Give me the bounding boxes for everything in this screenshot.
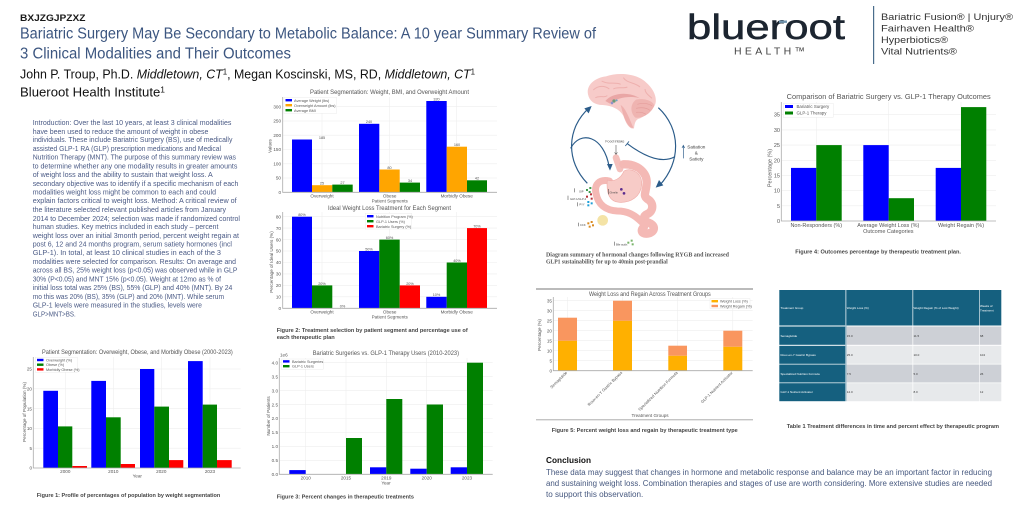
chart: ideal weight loss treatment for each segment: 70% [473,224,481,228]
chart: weight loss and regain across treatment groups: Percentage (%) [537,319,542,351]
caption: figure 2: each therapeutic plan [277,335,335,341]
chart: weight loss and regain across treatment groups: 15 [547,338,552,343]
chart: comparison of bariatric surgery vs GLP-1: Non-Responders (%) [790,223,842,229]
chart: patient segmentation weight BMI overweight amount: 27 [340,181,345,185]
chart: bariatric surgeries vs GLP-1 users: 1e6 [280,352,288,358]
chart: overweight obese morbidly obese population: Morbidly Obese (%) [46,368,80,372]
table 1: treatment differences [779,290,1001,401]
table 1: treatment differences: Weight Loss (%) [847,306,869,310]
chart: patient segmentation weight BMI overweight amount: 200 [273,133,281,138]
chart: weight loss and regain across treatment groups: 20 [547,328,552,333]
chart: ideal weight loss treatment for each segment: 60% [386,236,394,240]
chart: comparison of bariatric surgery vs GLP-1: Weight Regain (%) [938,223,984,229]
chart: comparison of bariatric surgery vs GLP-1: 25 [774,143,780,149]
chart: overweight obese morbidly obese population: 10 [27,426,32,431]
chart: ideal weight loss treatment for each segment: 70 [276,226,281,231]
chart: weight loss and regain across treatment groups: Weight Loss (%) [720,300,749,304]
abstract text: across all BS, 25% weight loss (p<0.05) was observed while in GLP [33,266,237,274]
table 1: treatment differences: 15.0 [847,334,853,338]
abstract text: GLP-1 levels were measured in the studies, levels were [33,301,202,310]
arrows: brain gut loop [571,106,676,188]
diagram: hormonal changes brain and gut [568,74,706,246]
chart: overweight obese morbidly obese population: Overweight (%) [46,358,73,362]
chart: patient segmentation weight BMI overweight amount: 150 [273,147,281,152]
logo: blueroot health [687,8,845,58]
chart: overweight obese morbidly obese population: 2010 [108,469,119,474]
chart: patient segmentation weight BMI overweight amount: 250 [273,119,281,124]
table 1: treatment differences: 25.0 [847,353,853,357]
abstract text: mo this was 20% (BS), 35% (GLP) and 20% (MNT). While serum [33,292,224,301]
title: Bariatric Surgery May Be Secondary to Metabolic Balance: A 10 year Summary Review of [20,26,597,42]
chart: weight loss and regain across treatment groups: 10 [547,348,552,353]
chart: comparison of bariatric surgery vs GLP-1: 5 [777,204,780,210]
chart: ideal weight loss treatment for each segment: Ideal Weight Loss Treatment for Each Segment [328,205,451,212]
chart: ideal weight loss treatment for each segment: Obese [383,310,397,314]
title [20,26,597,62]
chart: patient segmentation weight BMI overweight amount: 320 [433,98,440,102]
caption: diagram summary: Diagram summary of hormonal changes following RYGB and increased [546,251,729,258]
chart: ideal weight loss treatment for each segment: 40 [276,260,281,265]
hormone dots and labels [568,187,634,246]
chart: patient segmentation weight BMI overweight amount: 185 [319,136,325,140]
chart: ideal weight loss treatment for each segment: Bariatric Surgery (%) [376,225,412,229]
caption: figure 3: Figure 3: Percent changes in therapeutic treatments [277,495,414,501]
table 1: treatment differences: Specialized Nutrition Formula [780,372,820,376]
chart: overweight obese morbidly obese population: 2000 [60,469,71,474]
institute: 1 [160,86,166,94]
authors: Middletown, CT [385,68,472,82]
chart: bariatric surgeries vs GLP-1 users: 3.5 [272,374,278,379]
chart: bariatric surgeries vs GLP-1 users [266,350,493,486]
logo: blueroot health: HEALTH™ [734,46,805,58]
abstract text: Nutrition Therapy (MNT). The purpose of this summary review was [33,152,236,162]
caption: figure 2: Figure 2: Treatment selection by patient segment and percentage use of [277,328,468,334]
chart: patient segmentation weight BMI overweight amount: 100 [273,162,281,166]
chart: bariatric surgeries vs GLP-1 users: Number of Patients [266,396,271,436]
brain illustration [588,74,656,129]
chart: weight loss and regain across treatment groups: Treatment Groups [631,413,669,418]
chart: patient segmentation weight BMI overweight amount: Morbidly Obese [441,194,473,198]
chart: bariatric surgeries vs GLP-1 users: 0.5 [272,458,278,463]
chart: patient segmentation weight BMI overweight amount: 25 [320,182,324,186]
table 1: treatment differences: 12.0 [847,390,853,394]
chart: overweight obese morbidly obese population: 2023 [205,469,216,474]
table 1: treatment differences: 68 [980,334,984,338]
chart: comparison of bariatric surgery vs GLP-1: GLP-1 Therapy [796,110,827,116]
caption: diagram summary: GLP1 sustainability for up to 40min post-prandial [546,259,668,266]
table 1: treatment differences: Weight Regain (% of Lost Weight) [914,306,959,310]
chart: overweight obese morbidly obese population: Patient Segmentation: Overweight, Obese, and Morbidly Obese (2000-2023) [42,349,233,356]
chart: ideal weight loss treatment for each segment: Morbidly Obese [441,310,473,314]
chart: comparison of bariatric surgery vs GLP-1: Average Weight Loss (%) [857,223,920,229]
table 1: treatment differences: 8.0 [914,390,918,394]
chart: weight loss and regain across treatment groups: 25 [547,318,552,323]
chart: bariatric surgeries vs GLP-1 users: 3.0 [272,388,278,393]
hormone dots and labels: Bile acids [616,242,628,246]
abstract text [32,118,240,318]
caption: figure 5: Figure 5: Percent weight loss and regain by therapeutic treatment type [552,428,738,434]
chart: comparison of bariatric surgery vs GLP-1: Bariatric Surgery [796,104,830,109]
label: satiation and satiety: & [695,150,699,155]
chart: comparison of bariatric surgery vs GLP-1: Percentage (%) [768,149,774,187]
chart: overweight obese morbidly obese population: 0 [29,466,32,471]
abstract text: explain factors critical to weight loss. Method: A critical review of [33,196,238,205]
chart: overweight obese morbidly obese population: Percentage of Population (%) [22,382,27,442]
chart: ideal weight loss treatment for each segment: GLP-1 Users (%) [376,220,406,224]
chart: patient segmentation weight BMI overweight amount: Overweight [310,194,334,198]
chart: overweight obese morbidly obese population [22,349,241,478]
chart: weight loss and regain across treatment groups: GLP-1 Nutrient Activator [700,370,734,404]
chart: patient segmentation weight BMI overweight amount: 160 [454,143,460,147]
chart: patient segmentation weight BMI overweight amount: Values [268,138,272,153]
chart: patient segmentation weight BMI overweight amount: 42 [475,176,479,180]
authors: 1 [471,68,476,76]
chart: ideal weight loss treatment for each segment: 50 [276,249,281,254]
abstract text: individuals. These include Bariatric Surgery (BS), use of medically [33,135,233,144]
chart: ideal weight loss treatment for each segment: Patient Segments [372,314,409,320]
brand list: Vital Nutrients® [881,46,957,56]
chart: comparison of bariatric surgery vs GLP-1: 20 [774,158,780,164]
label: satiation and satiety: Satiation [687,144,706,149]
chart: comparison of bariatric surgery vs GLP-1: 15 [774,173,780,179]
abstract text: GLP-1). In total, at least 10 clinical studies in each of the 3 [33,248,221,257]
chart: comparison of bariatric surgery vs GLP-1: 35 [774,113,780,119]
chart: ideal weight loss treatment for each segment: 10% [433,293,441,297]
abstract text: modalities were selected for comparison. Results: On average and [33,257,236,266]
gastrointestinal tract illustration [596,158,654,234]
chart: patient segmentation weight BMI overweight amount: Average Weight (lbs) [294,99,330,103]
chart: weight loss and regain across treatment groups: Weight Loss and Regain Across Treatment Groups [589,291,711,298]
chart: ideal weight loss treatment for each segment: Percentage of Ideal Users (%) [269,231,274,293]
chart: ideal weight loss treatment for each segment: 80 [276,214,281,219]
chart: overweight obese morbidly obese population: 20 [27,386,32,392]
chart: ideal weight loss treatment for each segment: 30 [276,272,281,277]
caption: diagram summary [546,251,729,266]
label: satiation and satiety [682,144,706,161]
chart: overweight obese morbidly obese population: 15 [27,406,32,411]
table 1: treatment differences: 26 [980,372,984,376]
chart: patient segmentation weight BMI overweight amount: 34 [408,179,412,183]
abstract text: assisted GLP-1 RA (GLP) prescription medications and Medical [33,144,221,153]
chart: weight loss and regain across treatment groups: 30 [547,308,552,313]
chart: patient segmentation weight BMI overweight amount: Average BMI [294,109,316,113]
chart: comparison of bariatric surgery vs GLP-1: Outcome Categories [863,229,914,235]
chart: patient segmentation weight BMI overweight amount: Overweight Amount (lbs) [294,104,336,108]
chart: comparison of bariatric surgery vs GLP-1: 10 [774,189,780,195]
brand list [873,6,1013,64]
authors: , Megan Koscinski, MS, RD, [227,68,385,82]
table 1: treatment differences: Roux-en-Y Gastric Bypass [780,353,816,357]
chart: weight loss and regain across treatment groups [536,288,753,420]
chart: overweight obese morbidly obese population: 5 [29,446,32,451]
caption: figure 1: Figure 1: Profile of percentages of population by weight segmentation [37,493,221,499]
abstract text: 2014 to December 2024; selection was made if randomized control [33,214,240,223]
chart: overweight obese morbidly obese population: Year [133,474,142,478]
chart: ideal weight loss treatment for each segment: Nutrition Program (%) [376,215,413,219]
abstract text: 30% (P<0.05) and MNT 15% (p<0.05). Weight at 12mo as % of [33,274,222,284]
chart: overweight obese morbidly obese population: 25 [27,367,32,372]
abstract text: modalities weight loss might be common to each and could [33,188,216,196]
chart: weight loss and regain across treatment groups: Specialized Nutrition Formula [637,370,679,412]
institute: Blueroot Health Institute [20,86,153,100]
abstract text: initial loss total was 25% (BS), 55% (GLP) and 40% (MNT). By 24 [33,283,232,292]
chart: bariatric surgeries vs GLP-1 users: 2023 [462,476,473,480]
chart: patient segmentation weight BMI overweight amount: Patient Segmentation: Weight, BMI, and Overweight Amount [310,89,469,96]
chart: ideal weight loss treatment for each segment: 40% [453,259,461,263]
chart: ideal weight loss treatment for each segment: 80% [298,213,306,217]
chart: patient segmentation weight BMI overweight amount: 0 [278,190,281,195]
abstract text: human studies. Key metrics included in each study – percent [33,222,218,231]
caption: table 1: Table 1 Treatment differences in time and percent effect by therapeutic program [787,424,999,430]
hormone dots and labels: PYY [579,203,585,207]
label: satiation and satiety: Satiety [689,156,704,161]
brand list: Fairhaven Health® [881,24,974,34]
chart: ideal weight loss treatment for each segment: 0 [278,306,281,311]
chart: ideal weight loss treatment for each segment: 20 [276,283,281,288]
chart: weight loss and regain across treatment groups: Weight Regain (%) [720,304,753,308]
chart: ideal weight loss treatment for each segment [269,205,497,320]
caption: figure 4: Figure 4: Outcomes percentage by therapeutic treatment plan. [795,250,961,256]
table 1: treatment differences: Treatment [980,308,994,312]
chart: patient segmentation weight BMI overweight amount: 240 [366,120,372,124]
chart: bariatric surgeries vs GLP-1 users: 2020 [422,476,432,480]
table 1: treatment differences: GLP-1 Nutrient Activator [780,390,813,394]
table 1: treatment differences: 12 [980,390,984,394]
hormone dots and labels: GLP-1/GLP-2 [570,197,587,201]
chart: patient segmentation weight BMI overweight amount [268,89,497,204]
chart: bariatric surgeries vs GLP-1 users: 2010 [301,476,311,480]
chart: weight loss and regain across treatment groups: Roux-en-Y Gastric Bypass [586,370,623,407]
poster id: BXJZGJPZXZ [20,13,86,23]
chart: bariatric surgeries vs GLP-1 users: 2.0 [272,416,278,421]
table 1: treatment differences: 5.0 [914,372,918,376]
chart: overweight obese morbidly obese population: 2020 [156,469,167,474]
caption: figure 2 [277,328,468,341]
abstract text: have been used to reduce the amount of weight in obese [33,127,208,136]
conclusion: and sustaining weight loss. Combination therapies and stages of use are worth considering. More extensive studies are needed [546,479,992,488]
chart: bariatric surgeries vs GLP-1 users: 1.5 [272,430,278,435]
chart: overweight obese morbidly obese population: Obese (%) [46,363,65,367]
table 1: treatment differences: Weeks of [980,304,993,308]
abstract text: Introduction: Over the last 10 years, at least 3 clinical modalities [33,118,232,127]
chart: comparison of bariatric surgery vs GLP-1: 0 [777,219,780,225]
table 1: treatment differences: 7.5 [847,372,851,376]
table 1: treatment differences: 11.5 [914,334,919,338]
label: food intake: Food intake [605,139,624,143]
chart: ideal weight loss treatment for each segment: 0% [340,304,346,308]
abstract text: post 6, 12 and 24 months program, serum satiety hormones (incl [33,240,232,248]
chart: bariatric surgeries vs GLP-1 users: 2015 [341,476,352,480]
conclusion: Conclusion [546,456,591,465]
chart: comparison of bariatric surgery vs GLP-1: 30 [774,128,780,134]
label: food intake [605,139,624,155]
chart: patient segmentation weight BMI overweight amount: Obese [383,194,397,198]
table 1: treatment differences: Treatment Group [780,306,804,310]
hormone dots and labels: Ghrelin [609,191,618,195]
chart: ideal weight loss treatment for each segment: Overweight [310,310,334,314]
chart: bariatric surgeries vs GLP-1 users: 0.0 [272,472,278,477]
chart: patient segmentation weight BMI overweight amount: 80 [387,166,392,170]
conclusion [546,456,992,499]
chart: bariatric surgeries vs GLP-1 users: Bariatric Surgeries vs. GLP-1 Therapy Users (2010-2023) [313,350,459,357]
abstract text: secondary objective was to identify if a specific mechanism of each [33,179,238,188]
authors: John P. Troup, Ph.D. Middletown, CT [20,68,224,82]
table 1: treatment differences: Semaglutide [780,334,798,338]
abstract text: the literature selected relevant published articles from January [33,205,226,214]
chart: bariatric surgeries vs GLP-1 users: 2.5 [272,402,278,407]
chart: weight loss and regain across treatment groups: 0 [549,368,552,373]
chart: weight loss and regain across treatment groups: 5 [549,358,552,363]
chart: bariatric surgeries vs GLP-1 users: 4.0 [272,360,278,365]
chart: weight loss and regain across treatment groups: 35 [547,298,552,303]
hormone dots and labels: GIP [579,189,584,193]
title: 3 Clinical Modalities and Their Outcomes [20,46,291,62]
chart: bariatric surgeries vs GLP-1 users: Year [381,480,391,486]
authors: 1 [223,68,228,76]
chart: comparison of bariatric surgery vs GLP-1 [768,94,996,235]
chart: weight loss and regain across treatment groups: Semaglutide [549,370,569,389]
logo: blueroot health: blueroot [687,8,845,47]
conclusion: These data may suggest that changes in hormone and metabolic response and balance may be an important factor in reducing [546,468,992,477]
conclusion: to support this observation. [546,490,643,499]
header: poster id, title and authors [20,13,597,100]
chart: patient segmentation weight BMI overweight amount: Patient Segments [372,198,409,204]
abstract text: of weight loss and the ability to sustain that weight loss. A [33,170,213,179]
chart: comparison of bariatric surgery vs GLP-1: Comparison of Bariatric Surgery vs. GLP-1 Therapy Outcomes [787,94,991,101]
chart: patient segmentation weight BMI overweight amount: 50 [276,176,281,181]
chart: ideal weight loss treatment for each segment: 50% [365,248,373,252]
chart: ideal weight loss treatment for each segment: 20% [318,282,326,286]
abstract text: weight loss over an initial 3month period, percent weight regain at [32,231,239,240]
abstract text: GLP>MNT>BS. [33,309,76,318]
chart: ideal weight loss treatment for each segment: 60 [276,237,281,242]
brand list: Bariatric Fusion® | Unjury® [881,12,1013,22]
hormone dots and labels: CCK [580,223,586,227]
chart: bariatric surgeries vs GLP-1 users: 1.0 [272,444,278,449]
chart: bariatric surgeries vs GLP-1 users: Bariatric Surgeries [292,360,323,364]
chart: ideal weight loss treatment for each segment: 20% [406,282,414,286]
table 1: treatment differences: 104 [980,353,985,357]
chart: patient segmentation weight BMI overweight amount: 300 [273,104,281,109]
abstract text: to determine whether any one modality results in greater amounts [33,162,238,170]
table 1: treatment differences: 10.0 [914,353,920,357]
brand list: Hyperbiotics® [881,35,948,45]
chart: ideal weight loss treatment for each segment: 10 [276,294,281,300]
chart: bariatric surgeries vs GLP-1 users: GLP-1 Users [292,365,314,369]
chart: bariatric surgeries vs GLP-1 users: 2019 [381,476,392,480]
